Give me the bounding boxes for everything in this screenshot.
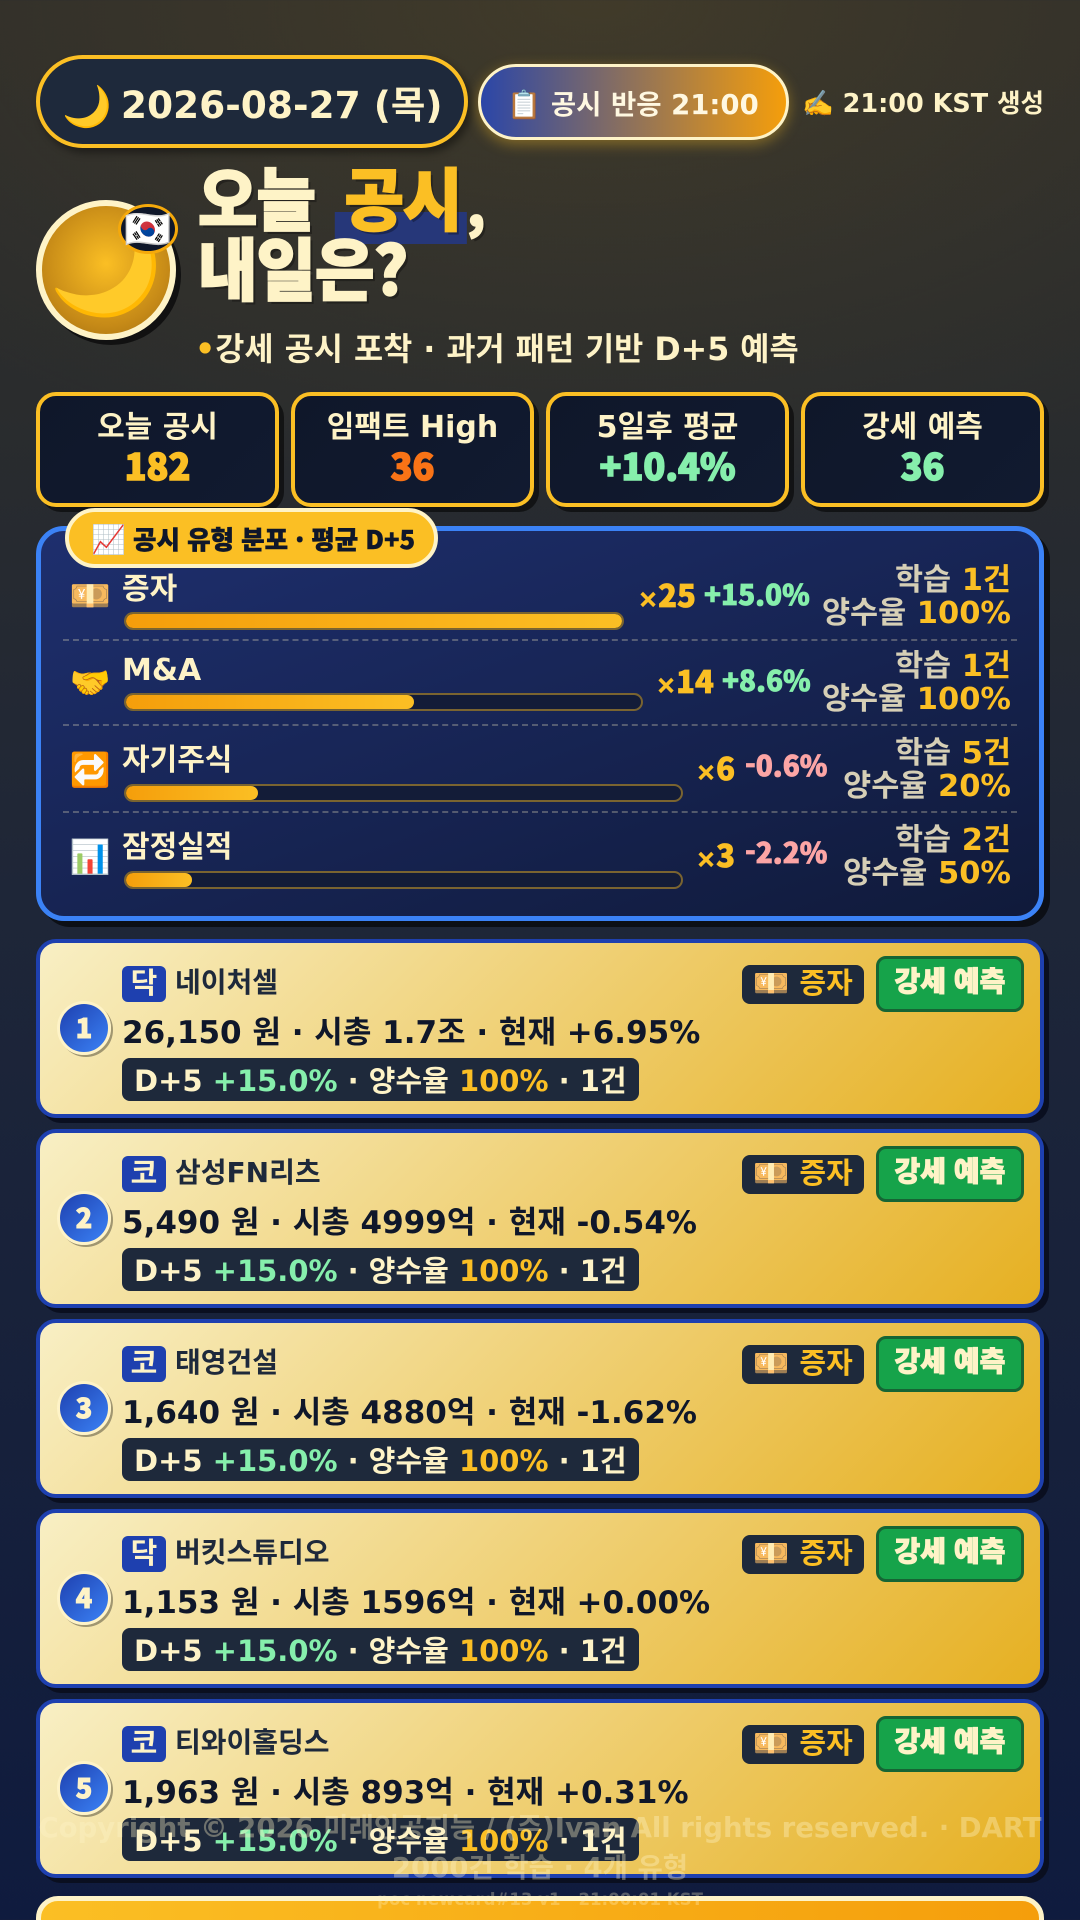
icon: Korean flag badge [118,204,178,254]
card: 네이처셀: 1 [76,1007,92,1046]
KPI: today disclosures [36,392,279,507]
card: 티와이홀딩스 [36,1699,1044,1878]
mascot: moon with flag [36,200,181,345]
card: 태영건설: 강세 예측 [895,1340,1005,1380]
footer: copyright [38,1812,1042,1909]
card: 버킷스튜디오: 강세 예측 [895,1530,1005,1570]
KPI: strong forecast: 36 [901,439,944,491]
card: 태영건설: 태영건설 [175,1346,278,1379]
row: 잠정실적: 📊 [69,837,111,876]
badge: disclosure reaction time [478,64,789,140]
row: M&A: +8.6% [722,660,811,700]
footer: copyright: 2000건 학습 · 4개 유형 [392,1852,688,1884]
card: 네이처셀: 26,150 원 · 시총 1.7조 · 현재 +6.95% [122,1015,700,1051]
card: 삼성FN리츠: 2 [76,1197,92,1236]
card: 태영건설 [36,1319,1044,1498]
footer: copyright: Copyright © 2026 미래인공지능 / (주)Ivan All rights reserved. · DART [38,1812,1042,1844]
KPI: impact high: 36 [391,439,434,491]
row: 증자: 💴 [69,576,111,615]
card: 버킷스튜디오: 4 [76,1577,92,1616]
row: M&A: 학습 1건 [895,649,1011,684]
row: 증자: 학습 1건 [895,563,1011,598]
row: M&A: M&A [122,653,201,688]
panel heading tag [65,508,438,568]
subtitle: •강세 공시 포착 · 과거 패턴 기반 D+5 예측 [195,332,799,368]
card: 삼성FN리츠: 코 [131,1156,157,1190]
card: 삼성FN리츠: 💴 증자 [753,1156,853,1190]
card: 버킷스튜디오: 버킷스튜디오 [175,1536,330,1569]
card: 네이처셀: 네이처셀 [175,966,278,999]
KPI: D+5 average: 5일후 평균 [597,410,738,445]
KPI: strong forecast: 강세 예측 [862,410,983,445]
card: 티와이홀딩스: 티와이홀딩스 [175,1726,330,1759]
card: 삼성FN리츠 [36,1129,1044,1308]
KPI: strong forecast [801,392,1044,507]
icon: Korean flag badge: 🇰🇷 [124,207,172,251]
card: 버킷스튜디오: 닥 [131,1536,157,1570]
card: 삼성FN리츠: 삼성FN리츠 [175,1156,321,1189]
row: 잠정실적: 학습 2건 [895,823,1011,858]
card: 네이처셀: 💴 증자 [753,966,853,1000]
card: 네이처셀 [36,939,1044,1118]
card: 버킷스튜디오: 💴 증자 [753,1536,853,1570]
card: 태영건설: 💴 증자 [753,1346,853,1380]
row: M&A [69,649,1011,717]
card: 버킷스튜디오: 1,153 원 · 시총 1596억 · 현재 +0.00% [122,1585,710,1621]
card: 태영건설: 코 [131,1346,157,1380]
KPI: impact high: 임팩트 High [327,410,498,445]
row: 자기주식 [69,736,1011,804]
row: M&A: 양수율 100% [822,682,1011,717]
row: 자기주식: 학습 5건 [895,736,1011,771]
card: 삼성FN리츠: 5,490 원 · 시총 4999억 · 현재 -0.54% [122,1205,697,1241]
KPI: impact high [291,392,534,507]
row: 자기주식: 🔁 [69,750,111,789]
card: 삼성FN리츠: 강세 예측 [895,1150,1005,1190]
card: 버킷스튜디오: D+5 +15.0% · 양수율 100% · 1건 [134,1634,627,1668]
card: 태영건설: D+5 +15.0% · 양수율 100% · 1건 [134,1444,627,1478]
title: 오늘 공시, [198,146,484,245]
generated time: ✍️ 21:00 KST 생성 [802,89,1044,119]
row: 증자: 양수율 100% [822,596,1011,631]
panel heading tag: 📈 공시 유형 분포 · 평균 D+5 [91,518,415,558]
mascot: moon with flag: 🌙 [49,214,163,321]
date pill [36,55,468,148]
row: 증자 [69,563,1011,631]
row: M&A: 🤝 [69,663,111,702]
card: 티와이홀딩스: 1,963 원 · 시총 893억 · 현재 +0.31% [122,1775,689,1811]
card: 티와이홀딩스: 코 [131,1726,157,1760]
card: 태영건설: 1,640 원 · 시총 4880억 · 현재 -1.62% [122,1395,697,1431]
card: 티와이홀딩스: 강세 예측 [895,1720,1005,1760]
row: 잠정실적: -2.2% [745,832,827,872]
row: 자기주식: 자기주식 [122,743,232,778]
card: 티와이홀딩스: 5 [76,1767,92,1806]
row: 잠정실적 [69,823,1011,891]
row: 자기주식: ×6 [696,744,735,789]
card: 네이처셀: 닥 [131,966,157,1000]
row: 증자: ×25 [638,571,696,616]
KPI: D+5 average: +10.4% [600,439,735,491]
row: M&A: ×14 [656,657,714,702]
row: 잠정실적: ×3 [696,831,735,876]
row: 잠정실적: 양수율 50% [843,856,1011,891]
row: 자기주식: -0.6% [745,745,827,785]
date pill: 🌙 2026-08-27 (목) [62,83,443,130]
footer: copyright: poc newcard#13 v1 · 21:00:01 KST [377,1890,703,1909]
KPI: today disclosures: 182 [125,439,190,491]
card: 티와이홀딩스: 💴 증자 [753,1726,853,1760]
row: 잠정실적: 잠정실적 [122,830,232,865]
row: 증자: 증자 [122,572,177,607]
KPI: today disclosures: 오늘 공시 [97,410,218,445]
card: 티와이홀딩스: D+5 +15.0% · 양수율 100% · 1건 [134,1824,627,1858]
badge: disclosure reaction time: 📋 공시 반응 21:00 [507,89,759,121]
card: 네이처셀: 강세 예측 [895,960,1005,1000]
title [198,146,486,315]
row: 자기주식: 양수율 20% [843,769,1011,804]
bottom banner [36,1896,1044,1920]
panel: disclosure type distribution [36,526,1044,921]
card: 태영건설: 3 [76,1387,92,1426]
KPI: D+5 average [546,392,789,507]
row: 증자: +15.0% [704,574,810,614]
card: 삼성FN리츠: D+5 +15.0% · 양수율 100% · 1건 [134,1254,627,1288]
title: 내일은? [198,216,407,315]
card: 네이처셀: D+5 +15.0% · 양수율 100% · 1건 [134,1064,627,1098]
card: 버킷스튜디오 [36,1509,1044,1688]
